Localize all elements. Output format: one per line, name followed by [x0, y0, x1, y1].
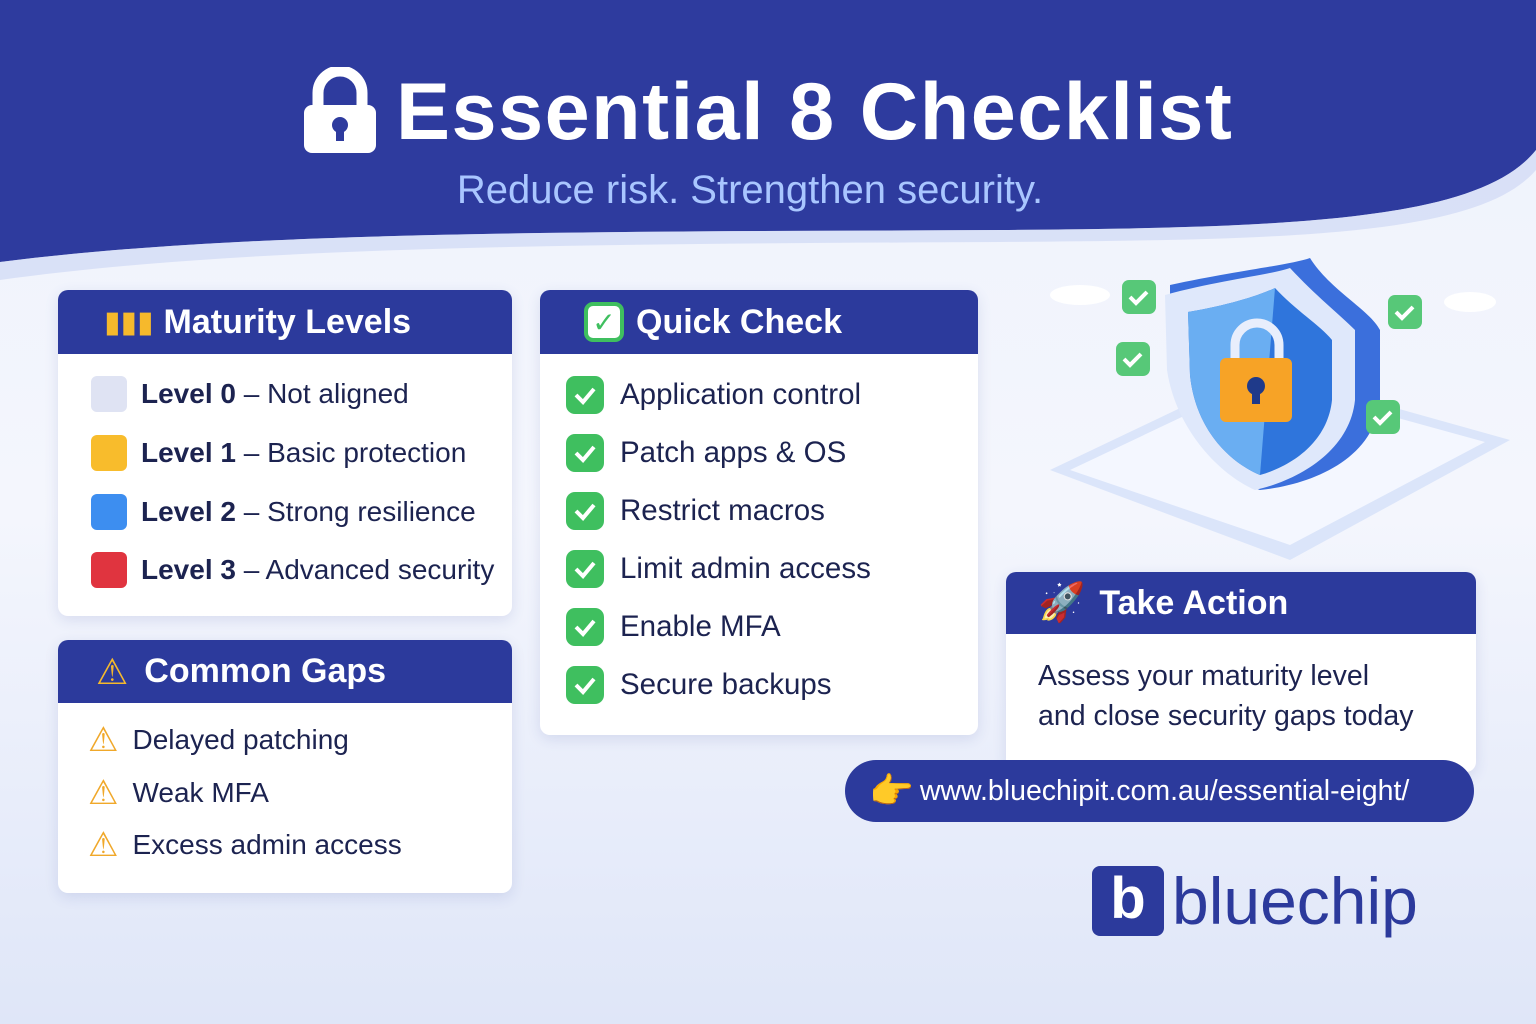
panel: maturity levels: – Advanced security: [244, 554, 494, 585]
title: Essential 8 Checklist: [396, 66, 1233, 156]
panel: common gaps: [58, 640, 512, 893]
panel: common gaps: ⚠: [88, 721, 118, 759]
panel: maturity levels: Level 0: [141, 378, 236, 409]
illustration: shield on laptop: [1050, 258, 1510, 560]
panel: maturity levels: ▮▮▮: [104, 306, 154, 338]
panel: common gaps: ⚠: [88, 826, 118, 864]
header band: [0, 0, 1536, 280]
panel: quick check: ✓: [592, 306, 616, 338]
panel: quick check: Application control: [620, 378, 861, 411]
panel: quick check: Patch apps & OS: [620, 436, 846, 469]
panel: take action: Take Action: [1099, 584, 1288, 622]
logo: bluechip: b: [1110, 866, 1146, 931]
url pill: www.bluechipit.com.au/essential-eight/: [920, 774, 1409, 806]
panel: common gaps: Weak MFA: [132, 777, 269, 808]
panel: take action: [1006, 572, 1476, 772]
panel: common gaps: ⚠: [88, 774, 118, 812]
panel: take action: and close security gaps today: [1038, 700, 1413, 732]
panel: quick check: [540, 290, 978, 735]
panel: quick check: Restrict macros: [620, 494, 825, 527]
panel: take action: 🚀: [1038, 582, 1085, 624]
panel: common gaps: Common Gaps: [144, 652, 386, 690]
panel: quick check: Enable MFA: [620, 610, 781, 643]
panel: maturity levels: Maturity Levels: [164, 302, 411, 340]
panel: common gaps: Excess admin access: [132, 829, 402, 860]
panel: maturity levels: – Basic protection: [244, 437, 466, 468]
url pill: 👉: [869, 770, 914, 811]
panel: common gaps: Delayed patching: [132, 724, 349, 755]
panel: maturity levels: – Not aligned: [244, 378, 409, 409]
panel: common gaps: ⚠: [96, 650, 128, 692]
panel: maturity levels: – Strong resilience: [244, 496, 476, 527]
url pill: [845, 760, 1474, 822]
subtitle: Reduce risk. Strengthen security.: [457, 168, 1043, 212]
panel: quick check: Quick Check: [636, 302, 842, 340]
panel: take action: Assess your maturity level: [1038, 660, 1369, 692]
panel: quick check: Limit admin access: [620, 552, 871, 585]
panel: maturity levels: [58, 290, 512, 616]
panel: quick check: Secure backups: [620, 668, 832, 701]
panel: maturity levels: Level 1: [141, 437, 236, 468]
panel: maturity levels: Level 2: [141, 496, 236, 527]
icon: lock: [304, 67, 376, 153]
logo: bluechip: bluechip: [1172, 864, 1418, 938]
panel: maturity levels: Level 3: [141, 554, 236, 585]
